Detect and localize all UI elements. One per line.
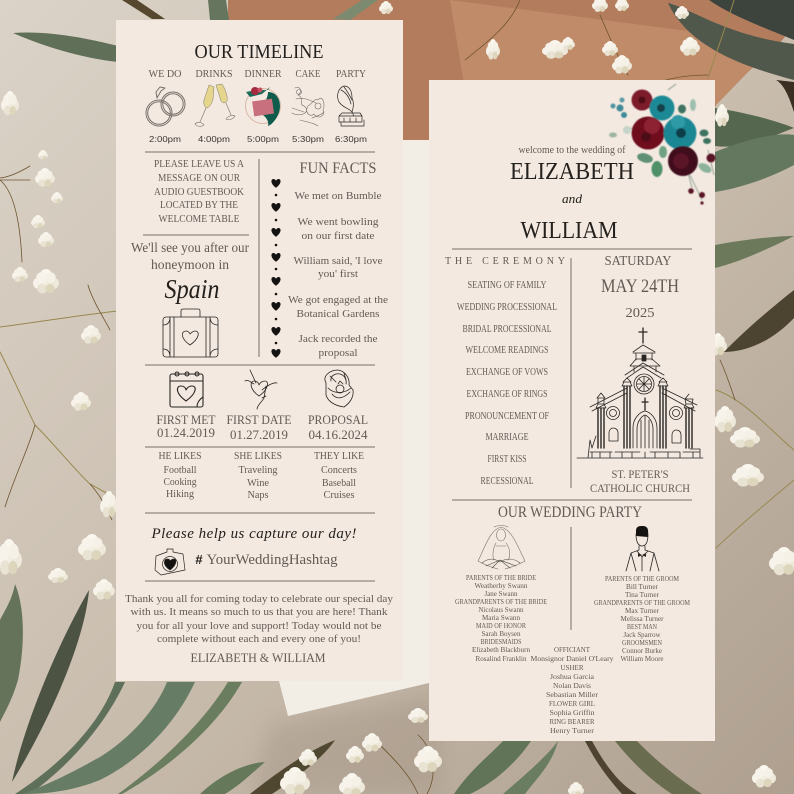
milestone dates: 04.16.2024 [308,428,368,442]
audio guestbook note: LOCATED BY THE [160,199,238,211]
timeline times: 6:30pm [335,134,367,144]
thank you message: Thank you all for coming today to celebrate our special day [125,593,394,605]
officiant, ushers and children list: Joshua Garcia [550,673,595,681]
milestone dates: 01.27.2019 [230,428,288,442]
groom party list: BEST MAN [627,623,657,631]
fun facts list: William said, 'I love [294,256,383,267]
officiant, ushers and children list [530,646,614,735]
honeymoon note: We'll see you after our [131,240,249,255]
likes columns [158,451,364,501]
hashtag: # [195,552,203,567]
wedding date: 2025 [626,306,654,321]
signature: couple names: ELIZABETH & WILLIAM [190,651,326,665]
likes columns: Concerts [321,465,357,476]
bride name: ELIZABETH [510,159,634,185]
bride party list: Jane Swann [484,590,518,598]
groom party list: Tina Turner [625,591,660,599]
bride party list: PARENTS OF THE BRIDE [466,574,536,582]
icon: wedding rings [146,87,185,126]
icon: groom [626,526,659,571]
script: and: and [562,191,583,206]
fun facts list: Botanical Gardens [296,309,380,320]
timeline times: 5:30pm [292,134,324,144]
ceremony schedule: EXCHANGE OF VOWS [466,367,548,378]
honeymoon note: honeymoon in [151,257,229,272]
groom party list: GRANDPARENTS OF THE GROOM [594,599,691,607]
icon: dinner plate [246,87,280,126]
church name: ST. PETER'S [612,469,668,481]
bride party list: Maria Swann [482,614,520,622]
bride party list [455,574,547,663]
ceremony schedule [457,280,557,487]
timeline labels [148,68,366,80]
timeline labels: DINNER [244,68,282,80]
groom party list: Bill Turner [626,583,659,591]
officiant, ushers and children list: Sebastian Miller [546,691,599,699]
timeline labels: DRINKS [196,68,232,80]
heading: our wedding party: OUR WEDDING PARTY [498,504,642,521]
likes columns: SHE LIKES [234,451,282,462]
background: white envelope [279,140,429,716]
bride party list: Weatherby Swann [474,582,528,590]
floral corner [609,84,716,205]
likes columns: Hiking [166,489,194,500]
fun facts list [288,191,388,359]
icon: cake [292,87,324,126]
heart and dot timeline [271,179,281,358]
fun facts list: We went bowling [298,217,379,228]
officiant, ushers and children list: Sophia Griffin [550,709,595,717]
likes columns: Cooking [164,477,196,488]
welcome line: welcome to the wedding of [518,145,626,156]
timeline labels: WE DO [148,68,182,80]
bride party list: GRANDPARENTS OF THE BRIDE [455,598,547,606]
officiant, ushers and children list: USHER [560,664,584,672]
likes columns: Football [164,465,197,476]
milestone dates: 01.24.2019 [157,426,215,440]
timeline times: 5:00pm [247,134,279,144]
wedding date [601,254,679,321]
thank you message: complete without each and every one of you! [157,633,361,645]
milestone dates: FIRST MET [156,413,216,427]
milestone dates [156,413,368,442]
ceremony schedule: EXCHANGE OF RINGS [466,389,548,400]
likes columns: Baseball [322,478,356,489]
groom party list: William Moore [620,655,664,663]
fun facts list: Jack recorded the [298,334,378,345]
fun facts list: We met on Bumble [294,191,382,202]
ceremony schedule: MARRIAGE [486,432,528,443]
script: please help: Please help us capture our day! [150,526,356,542]
timeline labels: CAKE [296,68,321,80]
timeline times: 2:00pm [149,134,181,144]
thank you message: with us. It means so much to us that you are here! Thank [130,606,388,618]
icon: church [577,328,703,458]
church name: CATHOLIC CHURCH [590,483,690,495]
likes columns: Wine [247,478,270,489]
script: Spain: Spain [164,274,220,304]
bride party list: Sarah Boysen [482,630,521,638]
church name [590,469,690,495]
milestone dates: FIRST DATE [226,413,292,427]
background: soft shadows [250,695,440,794]
likes columns: THEY LIKE [314,451,364,462]
officiant, ushers and children list: Monsignor Daniel O'Leary [530,655,614,663]
officiant, ushers and children list: Nolan Davis [553,682,591,690]
timeline times: 4:00pm [198,134,230,144]
icon: calendar [170,372,203,407]
ceremony schedule: FIRST KISS [488,454,526,465]
heading: the ceremony: THE CEREMONY [445,256,565,267]
bride party list: MAID OF HONOR [476,622,526,630]
heading: fun facts: FUN FACTS [300,160,376,177]
audio guestbook note: AUDIO GUESTBOOK [154,186,244,198]
bride party list: Rosalind Franklin [476,655,527,663]
groom party list: Connor Burke [622,647,662,655]
wedding date: SATURDAY [604,254,672,269]
icon: gramophone [338,86,364,126]
groom party list: Melissa Turner [620,615,664,623]
ceremony schedule: SEATING OF FAMILY [468,280,546,291]
panel: timeline card [116,20,403,681]
fun facts list: We got engaged at the [288,295,388,306]
audio guestbook note: MESSAGE ON OUR [158,172,241,184]
panel: ceremony card [429,80,716,741]
fun facts list: you' first [318,269,358,280]
likes columns: HE LIKES [158,451,202,462]
heading: our timeline: OUR TIMELINE [194,41,324,63]
officiant, ushers and children list: OFFICIANT [554,646,591,654]
audio guestbook note: PLEASE LEAVE US A [154,158,244,170]
thank you message [125,593,394,645]
wedding date: MAY 24TH [601,276,679,297]
likes columns: Naps [248,490,269,501]
fun facts list: proposal [318,348,358,359]
bride party list: Nicolaus Swann [478,606,524,614]
groom party list: Jack Sparrow [624,631,661,639]
background: terracotta envelopes [228,0,794,150]
ceremony schedule: WEDDING PROCESSIONAL [457,302,557,313]
icon: camera with heart [155,549,185,575]
officiant, ushers and children list: FLOWER GIRL [549,700,595,708]
bride party list: Elizabeth Blackburn [472,646,531,654]
likes columns: Cruises [324,490,355,501]
ceremony schedule: PRONOUNCEMENT OF [465,411,549,422]
milestone dates: PROPOSAL [308,413,368,427]
groom party list: Max Turner [625,607,660,615]
icon: ring box [325,370,353,407]
likes columns: Traveling [238,465,278,476]
fun facts list: on our first date [302,231,375,242]
ceremony schedule: BRIDAL PROCESSIONAL [462,324,552,335]
audio guestbook note: WELCOME TABLE [158,213,240,225]
timeline labels: PARTY [336,68,366,80]
honeymoon note [131,240,249,272]
icon: heart with vine [245,370,277,409]
ceremony schedule: RECESSIONAL [480,476,534,487]
icon: champagne glasses [195,84,235,126]
groom party list [594,575,691,663]
thank you message: you for all your love and support! Today would not be [136,620,382,632]
hashtag: YourWeddingHashtag [206,552,338,568]
icon: bride [478,526,525,569]
audio guestbook note [154,158,244,225]
groom party list: PARENTS OF THE GROOM [605,575,680,583]
groom party list: GROOMSMEN [622,639,662,647]
bride party list: BRIDESMAIDS [480,638,522,646]
officiant, ushers and children list: RING BEARER [550,718,595,726]
ceremony schedule: WELCOME READINGS [466,345,548,356]
officiant, ushers and children list: Henry Turner [550,727,595,735]
icon: suitcase [163,309,218,357]
timeline times [149,134,367,144]
groom name: WILLIAM [520,218,618,244]
